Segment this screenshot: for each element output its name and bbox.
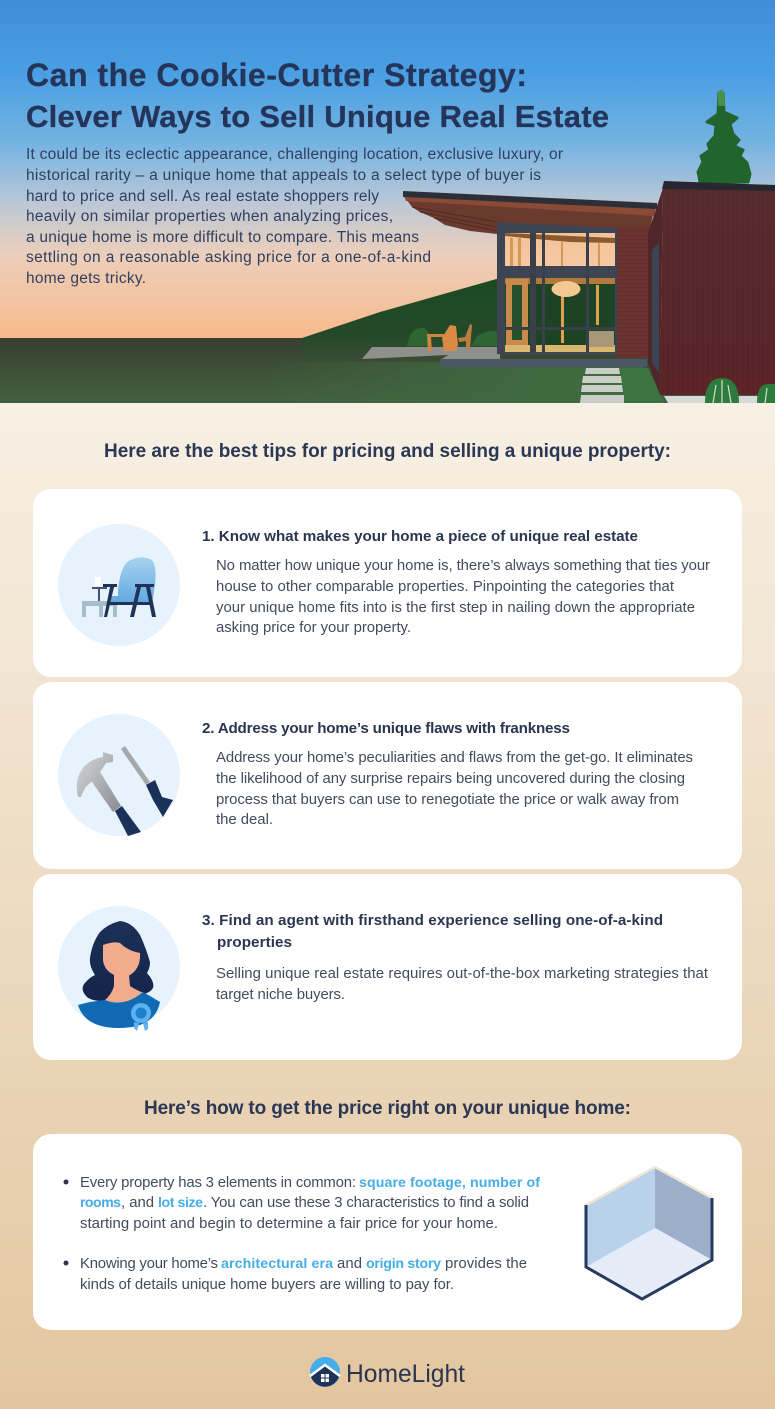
side door: [652, 243, 659, 373]
hero intro text: hard to price and sell. As real estate shoppers rely: [26, 188, 379, 205]
ground: [0, 338, 775, 403]
brick wall: [617, 228, 650, 358]
tip 3 heading: 3. Find an agent with firsthand experience selling one-of-a-kind: [202, 912, 663, 929]
sky: [0, 0, 775, 340]
bullet two: and: [337, 1256, 362, 1272]
icon: agent portrait: [58, 906, 180, 1031]
tip 3 heading: properties: [217, 934, 292, 951]
lawn: [328, 362, 664, 403]
hillside: [302, 278, 497, 351]
tree: [698, 90, 750, 182]
flat roof: [662, 181, 775, 191]
tip 2 body: Address your home’s peculiarities and flaws from the get-go. It eliminates: [216, 750, 693, 766]
roof soffit: [407, 200, 654, 234]
tip 3 body: Selling unique real estate requires out-of-the-box marketing strategies that: [216, 966, 709, 982]
hero illustration: sunset sky with modern house: [0, 0, 775, 403]
tip 2 body: [216, 750, 693, 828]
tip 1 body: asking price for your property.: [216, 620, 411, 636]
roof top: [403, 191, 657, 209]
tip 1 body: [216, 558, 710, 636]
tip 3 heading: [202, 912, 663, 951]
tip 3 body: [216, 966, 709, 1003]
heading: best tips: Here are the best tips for pricing and selling a unique property:: [104, 441, 671, 462]
panel: tip 1: [33, 489, 742, 677]
hero intro text: historical rarity – a unique home that appeals to a select type of buyer is: [26, 167, 541, 184]
icon: armchair: [58, 524, 180, 646]
hero title: [26, 57, 609, 134]
upper window: [505, 233, 615, 266]
tip 3 body: target niche buyers.: [216, 987, 345, 1003]
tip 2 heading: 2. Address your home’s unique flaws with frankness: [202, 720, 570, 737]
tip 1 body: No matter how unique your home is, there’s always something that ties your: [216, 558, 710, 574]
hero intro text: home gets tricky.: [26, 270, 146, 287]
bullet two: origin story: [366, 1256, 441, 1272]
heading: get the price right: Here’s how to get the price right on your unique home:: [144, 1098, 631, 1119]
patio: [362, 347, 500, 360]
bullet one: square footage, number of: [359, 1175, 540, 1191]
icon: isometric room: [586, 1167, 712, 1299]
roof fascia: [404, 196, 656, 216]
logo wordmark: HomeLight: [346, 1360, 465, 1388]
tip 2 body: the deal.: [216, 812, 273, 828]
panel: tip 2: [33, 682, 742, 869]
bullet two: architectural era: [221, 1256, 333, 1272]
panel: pricing elements: [33, 1134, 742, 1330]
front wall: [660, 188, 775, 395]
tip 1 heading: 1. Know what makes your home a piece of unique real estate: [202, 528, 638, 545]
bullet two: Knowing your home’s: [80, 1256, 218, 1272]
bullet one: [64, 1175, 540, 1232]
bullet one: lot size: [158, 1195, 203, 1211]
tip 1 body: house to other comparable properties. Pinpointing the categories that: [216, 579, 675, 595]
bullet two: [64, 1256, 527, 1293]
lower window interior: [505, 284, 615, 345]
shrubs: [407, 328, 497, 346]
side wall: [648, 188, 663, 395]
bullet one: . You can use these 3 characteristics to find a solid: [203, 1195, 529, 1211]
bullet one: , and: [121, 1195, 154, 1211]
hero title: Clever Ways to Sell Unique Real Estate: [26, 99, 609, 134]
bullet two: provides the: [445, 1256, 527, 1272]
window frame: [497, 222, 617, 354]
bullet one: Every property has 3 elements in common:: [80, 1175, 356, 1191]
hero title: Can the Cookie-Cutter Strategy:: [26, 57, 527, 93]
sidewalk: [664, 396, 758, 403]
panel: tip 3: [33, 874, 742, 1060]
logo mark: [310, 1357, 340, 1387]
bullet two: kinds of details unique home buyers are willing to pay for.: [80, 1277, 454, 1293]
hero intro text: settling on a reasonable asking price for a one-of-a-kind: [26, 249, 431, 266]
lower terrace step: [440, 359, 647, 367]
hero intro text: heavily on similar properties when analyzing prices,: [26, 208, 393, 225]
hero intro text: a unique home is more difficult to compare. This means: [26, 229, 419, 246]
page background: [0, 403, 775, 1409]
bushes: [705, 378, 775, 403]
tip 2 body: the likelihood of any surprise repairs being uncovered during the closing: [216, 771, 685, 787]
hero intro text: It could be its eclectic appearance, challenging location, exclusive luxury, or: [26, 146, 563, 163]
icon: hammer and screwdriver: [58, 714, 180, 836]
logo: HomeLight: [310, 1357, 465, 1388]
pendant lamp: [552, 281, 580, 297]
window mullions: [505, 233, 615, 352]
bullet one: rooms: [80, 1195, 121, 1211]
tip 1 body: your unique home fits into is the first step in nailing down the appropriate: [216, 600, 695, 616]
hero intro text: [26, 146, 563, 287]
side lawn: [620, 368, 664, 403]
stone pavers: [580, 368, 624, 403]
tip 2 body: process that buyers can use to renegotiate the price or walk away from: [216, 792, 679, 808]
bullet one: starting point and begin to determine a fair price for your home.: [80, 1216, 498, 1232]
adirondack chair: [427, 324, 472, 351]
